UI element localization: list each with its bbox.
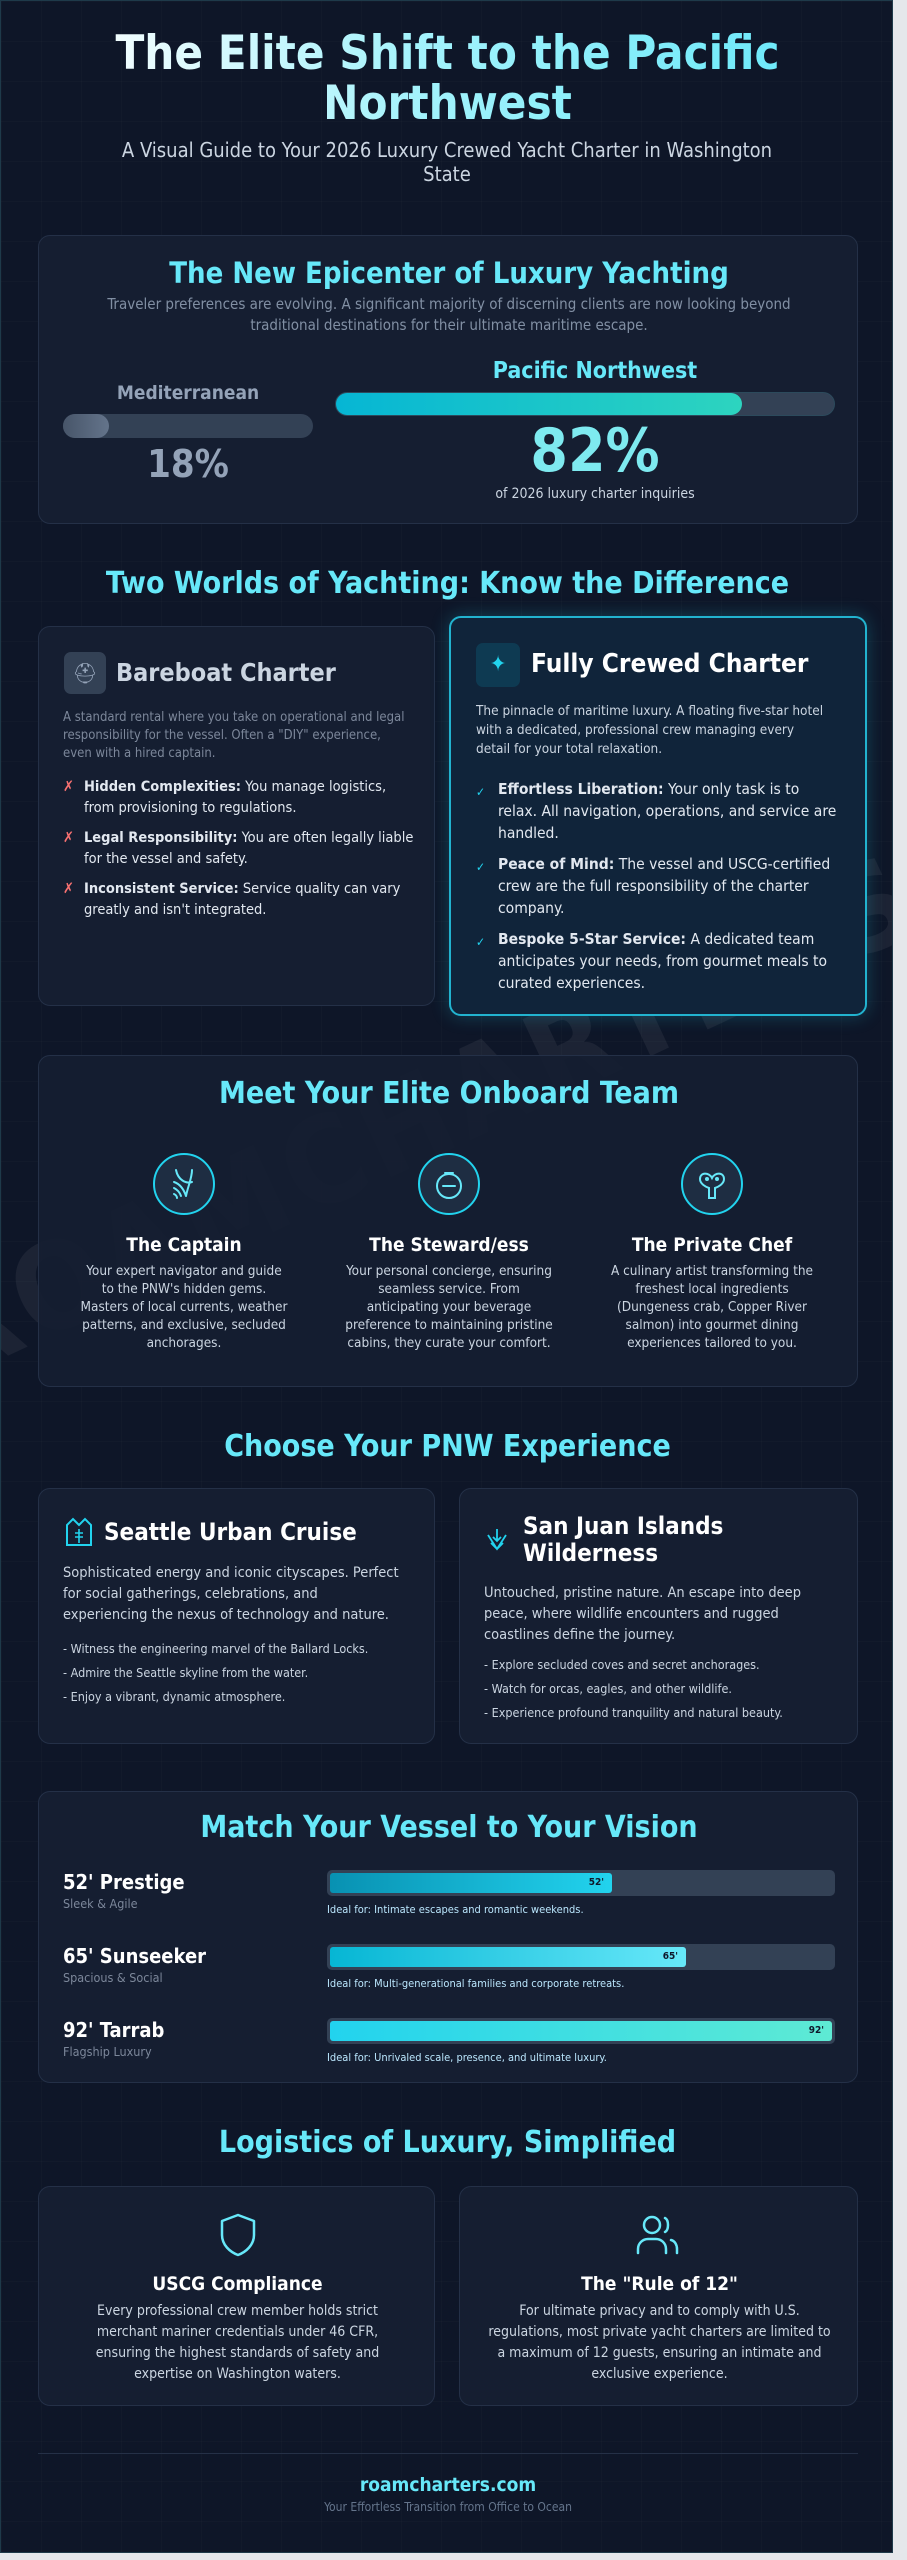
list: - Experience profound tranquility and natural beauty.	[484, 1705, 783, 1720]
panel: rule of 12	[459, 2186, 858, 2406]
list: drawbacks: Inconsistent Service: Service quality can vary greatly and isn't integrated.	[84, 881, 400, 918]
list: benefits: ✓	[476, 935, 485, 949]
list: drawbacks	[63, 779, 413, 918]
panel: fully crewed	[449, 616, 867, 1016]
team member: steward	[345, 1153, 553, 1351]
list: drawbacks: ✗	[63, 830, 74, 846]
heading: logistics: Logistics of Luxury, Simplified	[219, 2125, 676, 2160]
team member: steward: Your personal concierge, ensuring seamless service. From anticipating your beverage preference to maintaining pristine cabins, they curate your comfort.	[345, 1263, 553, 1351]
icon: shield	[220, 2214, 256, 2256]
team member: captain: The Captain	[126, 1234, 242, 1256]
icon: sparkles: ✦	[490, 652, 506, 677]
footer	[38, 2453, 858, 2514]
vessel: 92 tarrab: 92'	[809, 2025, 824, 2036]
list	[63, 1641, 368, 1704]
icon: sparkles	[476, 643, 520, 687]
title: Seattle Urban Cruise	[104, 1518, 357, 1546]
vessel: 52 prestige: 52'	[589, 1877, 604, 1888]
list: benefits: Effortless Liberation: Your only task is to relax. All navigation, operations, and service are handled.	[498, 780, 836, 842]
title: The Elite Shift to the Pacific Northwest	[115, 26, 780, 131]
panel: vessels	[38, 1791, 858, 2083]
text: For ultimate privacy and to comply with U.S. regulations, most private yacht charters are limited to a maximum of 12 guests, ensuring an intimate and exclusive experience.	[488, 2303, 831, 2382]
panel: epicenter	[38, 235, 858, 524]
icon: steward	[418, 1153, 480, 1215]
list: benefits: ✓	[476, 785, 485, 799]
list	[484, 1657, 783, 1720]
vessel: 65 sunseeker: 65'	[663, 1951, 678, 1962]
panel: bareboat	[38, 626, 435, 1006]
list: benefits: Bespoke 5-Star Service: A dedicated team anticipates your needs, from gourmet meals to curated experiences.	[498, 930, 827, 992]
icon: nature	[487, 1529, 507, 1550]
vessel: 65 sunseeker	[63, 1944, 835, 1990]
vessel: 92 tarrab	[63, 2018, 835, 2064]
vessel: 92 tarrab: 92' Tarrab	[63, 2018, 164, 2042]
description: Sophisticated energy and iconic cityscapes. Perfect for social gatherings, celebrations, and experiencing the nexus of technology and nature.	[63, 1565, 399, 1623]
icon: city	[66, 1518, 92, 1546]
panel: team	[38, 1055, 858, 1387]
team member: chef	[611, 1153, 813, 1351]
title: San Juan Islands Wilderness	[523, 1512, 723, 1567]
panel: san juan	[459, 1488, 858, 1744]
list: drawbacks: ✗	[63, 881, 74, 897]
vessel: 52 prestige: Sleek & Agile	[63, 1896, 138, 1911]
stat: mediterranean	[63, 382, 313, 486]
title: The "Rule of 12"	[581, 2273, 738, 2295]
subtitle: A Visual Guide to Your 2026 Luxury Crewed Yacht Charter in Washington State	[122, 138, 772, 186]
team member: chef: The Private Chef	[632, 1234, 792, 1256]
description: A standard rental where you take on operational and legal responsibility for the vessel. Often a "DIY" experience, even with a hired captain.	[63, 710, 404, 761]
list: drawbacks: Hidden Complexities: You manage logistics, from provisioning to regulations.	[84, 779, 386, 816]
vessel: 52 prestige	[63, 1870, 835, 1916]
title: Bareboat Charter	[116, 658, 336, 687]
icon: people	[636, 2216, 678, 2254]
icon: captain	[153, 1153, 215, 1215]
vessel: 65 sunseeker: Spacious & Social	[63, 1970, 163, 1985]
list: drawbacks: ✗	[63, 779, 74, 795]
team member: captain	[81, 1153, 288, 1351]
stat: pacific northwest	[335, 358, 835, 502]
stat: mediterranean: Mediterranean	[117, 382, 259, 404]
list: - Witness the engineering marvel of the Ballard Locks.	[63, 1641, 368, 1656]
heading: Meet Your Elite Onboard Team	[219, 1076, 679, 1111]
stat: pacific northwest: Pacific Northwest	[493, 358, 697, 384]
vessel: 65 sunseeker: 65' Sunseeker	[63, 1944, 206, 1968]
heading: The New Epicenter of Luxury Yachting	[169, 256, 729, 290]
intro text: Traveler preferences are evolving. A significant majority of discerning clients are now looking beyond traditional destinations for their ultimate maritime escape.	[107, 295, 791, 334]
list: benefits	[476, 780, 836, 992]
list: - Enjoy a vibrant, dynamic atmosphere.	[63, 1689, 285, 1704]
vessel: 52 prestige: 52' Prestige	[63, 1870, 185, 1894]
list: benefits: Peace of Mind: The vessel and USCG-certified crew are the full responsibility of the charter company.	[498, 855, 830, 917]
footer: Your Effortless Transition from Office to Ocean	[324, 2500, 572, 2514]
vessel: 92 tarrab: Flagship Luxury	[63, 2044, 152, 2059]
team member: chef: A culinary artist transforming the freshest local ingredients (Dungeness crab, Copper River salmon) into gourmet dining experiences tailored to you.	[611, 1263, 813, 1351]
footer: roamcharters.com	[360, 2474, 536, 2496]
text: Every professional crew member holds strict merchant mariner credentials under 46 CFR, ensuring the highest standards of safety and expertise on Washington waters.	[96, 2303, 379, 2382]
title: Fully Crewed Charter	[531, 649, 808, 679]
panel: uscg	[38, 2186, 435, 2406]
heading: choose experience: Choose Your PNW Experience	[224, 1429, 671, 1464]
panel: seattle	[38, 1488, 435, 1744]
heading: Match Your Vessel to Your Vision	[200, 1810, 698, 1845]
stat: mediterranean: 18%	[147, 442, 229, 486]
vessel: 92 tarrab: Ideal for: Unrivaled scale, presence, and ultimate luxury.	[327, 2051, 607, 2064]
list: - Explore secluded coves and secret anchorages.	[484, 1657, 760, 1672]
team member: captain: Your expert navigator and guide to the PNW's hidden gems. Masters of local currents, weather patterns, and exclusive, secluded anchorages.	[81, 1263, 287, 1351]
description: The pinnacle of maritime luxury. A floating five-star hotel with a dedicated, professional crew managing every detail for your total relaxation.	[476, 703, 823, 757]
heading: two worlds: Two Worlds of Yachting: Know the Difference	[106, 566, 789, 601]
description: Untouched, pristine nature. An escape into deep peace, where wildlife encounters and rugged coastlines define the journey.	[484, 1585, 801, 1643]
icon: anchor badge	[64, 652, 106, 694]
title: USCG Compliance	[152, 2273, 323, 2295]
icon: chef	[681, 1153, 743, 1215]
stat: pacific northwest: 82%	[530, 416, 660, 486]
list: drawbacks: Legal Responsibility: You are often legally liable for the vessel and safety.	[84, 830, 413, 867]
vessel: 52 prestige: Ideal for: Intimate escapes and romantic weekends.	[327, 1903, 584, 1916]
team member: steward: The Steward/ess	[369, 1234, 529, 1256]
stat: pacific northwest: of 2026 luxury charter inquiries	[495, 486, 695, 502]
list: benefits: ✓	[476, 860, 485, 874]
list: - Admire the Seattle skyline from the water.	[63, 1665, 308, 1680]
icon: anchor badge: ⛑	[72, 661, 98, 685]
vessel: 65 sunseeker: Ideal for: Multi-generational families and corporate retreats.	[327, 1977, 624, 1990]
list: - Watch for orcas, eagles, and other wildlife.	[484, 1681, 732, 1696]
